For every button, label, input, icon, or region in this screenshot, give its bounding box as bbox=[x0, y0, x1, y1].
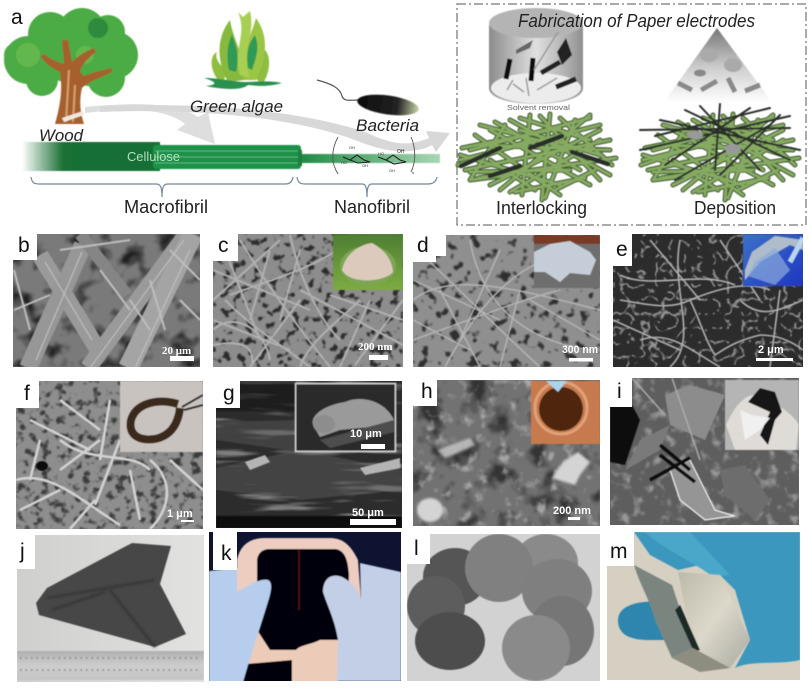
icon: green algae bbox=[204, 11, 282, 89]
scale bar d: 300 nm bbox=[562, 344, 598, 356]
interlocking label: Interlocking bbox=[496, 198, 587, 218]
panel h: SEM particles with electrode inset bbox=[413, 380, 600, 526]
brace: macrofibril bbox=[31, 177, 293, 197]
label d: d bbox=[417, 234, 429, 257]
brace: nanofibril bbox=[297, 177, 437, 197]
gloved fingers bbox=[209, 568, 271, 682]
panel m: bent foil photo bbox=[607, 532, 800, 680]
scale bar e: 2 μm bbox=[758, 344, 784, 356]
panel i: SEM flakes with paper inset bbox=[610, 378, 799, 525]
title: Fabrication of Paper electrodes bbox=[518, 11, 755, 31]
discs bbox=[423, 548, 487, 606]
grey arrow to green bar bbox=[85, 104, 215, 144]
label h bbox=[413, 380, 437, 406]
silver foil bbox=[634, 565, 693, 658]
inset: gel bbox=[534, 235, 600, 288]
scale bar c bbox=[358, 343, 392, 360]
label f: f bbox=[24, 382, 30, 405]
label c bbox=[213, 234, 238, 261]
nanofibril label: Nanofibril bbox=[334, 197, 410, 217]
label j bbox=[17, 535, 35, 569]
label i bbox=[610, 378, 632, 407]
ruler bbox=[17, 651, 204, 680]
panel label a: a bbox=[11, 6, 23, 29]
deposition label: Deposition bbox=[694, 198, 776, 218]
label m: m bbox=[610, 540, 628, 563]
cone with nanomaterials bbox=[664, 28, 772, 102]
inset: paper in hand bbox=[725, 380, 799, 450]
inset: powder bbox=[333, 234, 403, 290]
pink paper frame bbox=[237, 538, 361, 600]
panel c: SEM nanofibers with powder inset bbox=[213, 234, 403, 367]
icon: tree bbox=[4, 8, 138, 124]
label h: h bbox=[421, 380, 433, 403]
green algae label: Green algae bbox=[190, 97, 283, 116]
network: deposition bbox=[640, 104, 800, 200]
panel: fabrication of paper electrodes bbox=[457, 4, 806, 225]
bacteria label: Bacteria bbox=[356, 116, 419, 135]
cylinder with nanomaterials bbox=[489, 8, 583, 104]
panel j: folded paper photo bbox=[17, 535, 204, 682]
molecular structure: HO bbox=[341, 160, 347, 165]
wood label: Wood bbox=[39, 126, 84, 145]
scale bar inset: 10 μm bbox=[350, 428, 382, 440]
icon: bacterium bbox=[317, 80, 420, 119]
inset: magnified detail bbox=[296, 384, 396, 452]
inset: copper electrode bbox=[531, 381, 600, 444]
panel g: SEM cross-section with inset bbox=[216, 381, 402, 528]
scale bar h bbox=[553, 506, 590, 520]
solvent removal label: Solvent removal bbox=[507, 103, 570, 112]
label j: j bbox=[19, 540, 25, 563]
panel k: flexible electrode photo bbox=[209, 532, 401, 682]
scale bar b bbox=[162, 347, 194, 361]
folded paper bbox=[36, 543, 186, 647]
label b: b bbox=[18, 234, 30, 257]
label e bbox=[613, 234, 632, 266]
panel e: SEM network with transparent film inset bbox=[613, 234, 803, 367]
label i: i bbox=[617, 380, 622, 403]
molecular structure: OH bbox=[349, 145, 355, 150]
panel b: SEM wood fibers bbox=[13, 234, 200, 368]
panel l: paper discs photo bbox=[407, 534, 600, 681]
panel a: cellulose sources and fibril diagram bbox=[4, 6, 450, 217]
label g: g bbox=[223, 382, 235, 405]
molecular structure: OH bbox=[362, 163, 368, 168]
molecular structure: OH bbox=[397, 149, 405, 155]
label c: c bbox=[218, 234, 228, 257]
molecular structure: OH bbox=[389, 168, 395, 173]
scale bar d bbox=[562, 346, 598, 362]
panel d: SEM nanofibers with hydrogel inset bbox=[413, 234, 600, 367]
macrofibril label: Macrofibril bbox=[124, 197, 208, 217]
scale bar g bbox=[350, 507, 396, 525]
scale bar g: 50 μm bbox=[352, 507, 384, 519]
dashed border bbox=[457, 4, 806, 225]
label k: k bbox=[221, 542, 232, 565]
inset: flexible film bbox=[120, 381, 203, 452]
scale bar e bbox=[756, 344, 793, 361]
molecular structure: HO bbox=[378, 151, 384, 156]
cellulose label: Cellulose bbox=[127, 150, 180, 164]
scale bar c: 200 nm bbox=[358, 341, 393, 353]
label g bbox=[216, 381, 240, 408]
scale bar inset bbox=[350, 428, 385, 449]
label l bbox=[407, 534, 430, 564]
scale bar b: 20 μm bbox=[162, 345, 191, 357]
inset: film in hand bbox=[743, 234, 803, 286]
molecular structure: n bbox=[412, 170, 414, 175]
grey arrow to fabrication box bbox=[100, 105, 450, 152]
label l: l bbox=[414, 537, 419, 560]
molecular structure bbox=[333, 137, 415, 175]
panel f: SEM composite with flexible film inset bbox=[16, 381, 203, 529]
cellulose fibril bar bbox=[22, 142, 440, 171]
label b bbox=[13, 234, 37, 260]
network: interlocking bbox=[458, 114, 616, 200]
label d bbox=[413, 234, 446, 262]
label f bbox=[16, 381, 39, 408]
scale bar h: 200 nm bbox=[553, 505, 591, 517]
scale bar f: 1 μm bbox=[167, 508, 193, 520]
glove bbox=[634, 532, 800, 668]
label k bbox=[213, 532, 237, 570]
black sheet bbox=[257, 549, 349, 650]
label e: e bbox=[616, 238, 628, 261]
label m bbox=[607, 532, 634, 566]
